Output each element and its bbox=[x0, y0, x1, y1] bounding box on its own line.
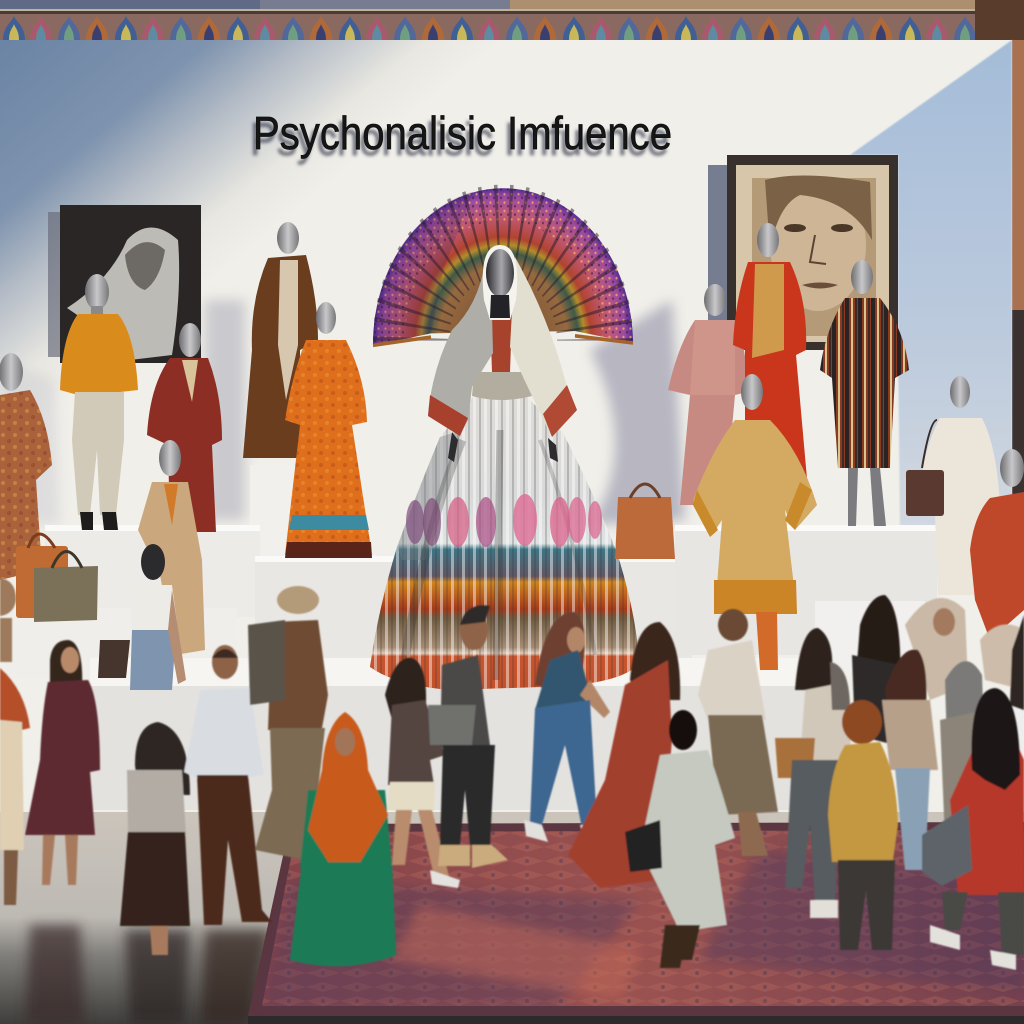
handbag: dark brown bbox=[906, 420, 944, 516]
mannequin: white blouse and jeans bbox=[98, 544, 186, 690]
back row: woman in brown bbox=[882, 650, 938, 870]
back row: right edge figures bbox=[980, 615, 1024, 710]
visitor: curly hair and brown skirt bbox=[120, 722, 190, 955]
floor bbox=[0, 812, 1024, 1024]
bodice bbox=[490, 315, 512, 372]
title: Psychonalisic Imfuence bbox=[253, 107, 672, 159]
visitor: man with backpack and hat bbox=[248, 586, 328, 860]
back row: grey-haired woman bbox=[940, 661, 985, 840]
display platforms bbox=[5, 465, 937, 810]
framed portrait: veiled figure bbox=[48, 205, 201, 363]
mannequin: white tunic bbox=[917, 376, 1000, 595]
mannequin: orange printed dress bbox=[285, 302, 372, 558]
crowd bbox=[0, 578, 1024, 970]
handbag: tan leather bbox=[615, 484, 675, 559]
mannequin hands bbox=[448, 432, 558, 462]
visitor: patterned blouse bbox=[385, 658, 460, 888]
visitor: blue top and jeans bbox=[524, 612, 610, 845]
back row: beige headscarf bbox=[905, 598, 968, 700]
mannequin: beige dress bbox=[138, 440, 205, 655]
mannequin: burgundy dress bbox=[147, 323, 222, 532]
visitor: red coat with grey bag bbox=[922, 688, 1024, 970]
hero fan bbox=[373, 188, 633, 345]
visitor: far-left woman bbox=[0, 668, 30, 905]
brick pillar bbox=[1010, 40, 1024, 530]
mannequin: patterned robe far left bbox=[0, 353, 52, 580]
mannequin: yellow jacket and trousers bbox=[60, 274, 138, 530]
sash bbox=[472, 372, 532, 400]
gallery wall bbox=[0, 40, 1012, 830]
visitor: flowing red dress bbox=[568, 622, 680, 888]
visitor: orange headscarf and green skirt bbox=[290, 712, 396, 966]
handbags on left platform bbox=[16, 534, 98, 622]
visitor: cream sweater and olive skirt bbox=[698, 609, 778, 856]
mannequin: striped kaftan bbox=[820, 260, 909, 526]
visitor: man in white shirt bbox=[184, 645, 272, 925]
mannequin: red dress with gold panel bbox=[733, 223, 808, 490]
ornate tiled frieze bbox=[0, 0, 1024, 40]
mannequin: golden kaftan bbox=[693, 374, 817, 670]
framed portrait: sepia face bbox=[708, 155, 898, 350]
hero dress with shawl bbox=[370, 245, 637, 690]
visitor: burgundy dress bbox=[25, 640, 100, 885]
mannequin: brown long coat bbox=[243, 222, 318, 458]
mannequin: rust dress far right bbox=[970, 449, 1024, 640]
skull figure at left edge bbox=[0, 578, 16, 662]
patterned rug bbox=[248, 822, 1024, 1024]
dress skirt bbox=[370, 397, 637, 690]
visitor: dark hair with tan bag bbox=[775, 628, 852, 918]
shawl bbox=[428, 257, 577, 437]
visitor: man with turban and beard bbox=[428, 605, 508, 868]
visitor: mustard coat and curly red hair bbox=[828, 700, 898, 950]
back row: dark-haired woman bbox=[852, 595, 900, 745]
mannequin head and veil bbox=[483, 245, 517, 320]
mannequin: pink patterned dress bbox=[668, 284, 747, 505]
visitor: grey long coat with black bag bbox=[625, 710, 735, 968]
